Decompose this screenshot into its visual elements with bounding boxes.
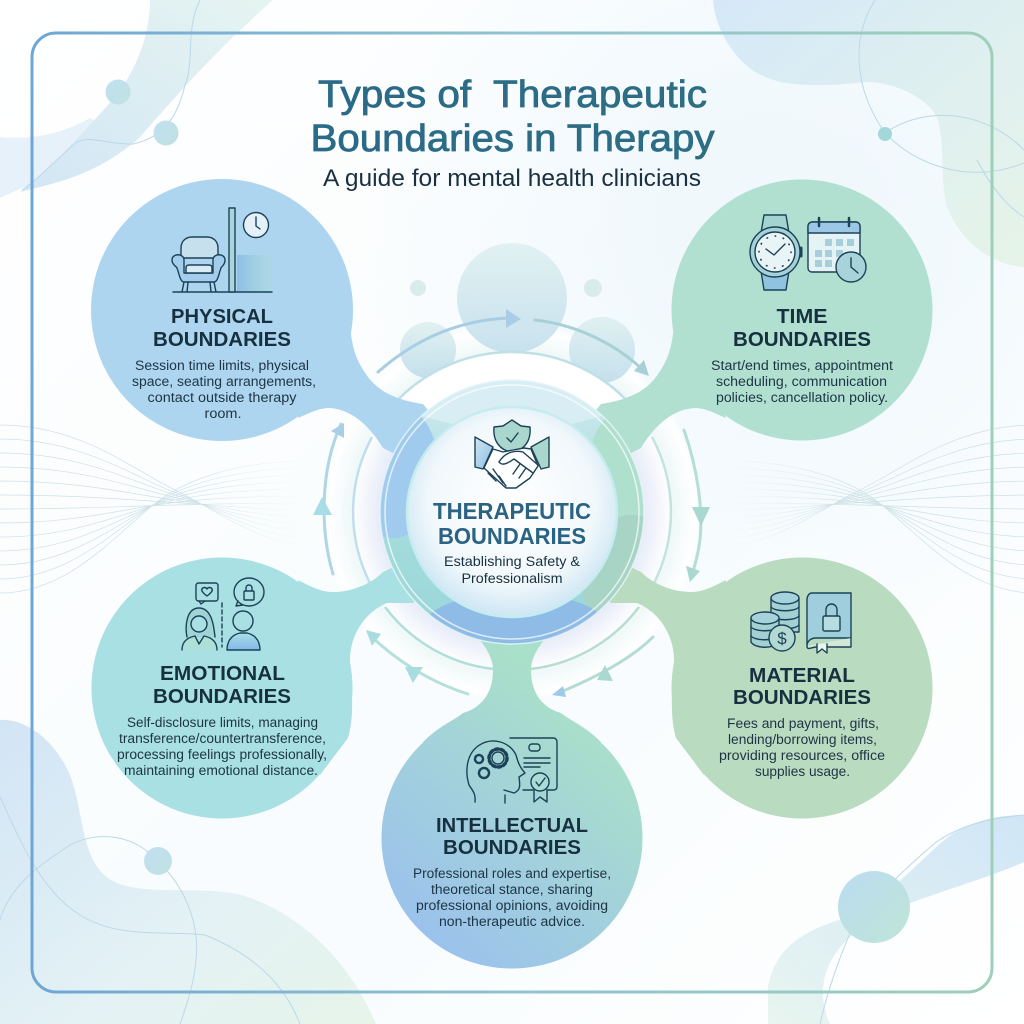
hub disc: BOUNDARIES [438, 523, 586, 549]
hub text: Establishing Safety & [444, 553, 581, 569]
wave pattern right [725, 425, 1024, 593]
panel: intellectual boundaries [382, 708, 642, 968]
heading: EMOTIONAL [160, 663, 285, 685]
description: Self-disclosure limits, managing [127, 715, 318, 730]
description: space, seating arrangements, [132, 374, 316, 389]
icon: shield and handshake [475, 420, 549, 488]
description: professional opinions, avoiding [416, 898, 608, 913]
icon: watch, calendar and clock [750, 215, 866, 290]
heading: INTELLECTUAL [436, 815, 588, 837]
panel: time boundaries [672, 180, 932, 440]
icon: coins and locked book [751, 592, 851, 653]
wave pattern left [0, 425, 310, 593]
heading: TIME [776, 306, 828, 328]
hub halo [322, 322, 702, 702]
icon: coins and locked book: $ [777, 629, 787, 648]
description: transference/countertransference, [119, 731, 326, 746]
description: Professional roles and expertise, [413, 866, 611, 881]
description: theoretical stance, sharing [431, 882, 593, 897]
panel: emotional boundaries: BOUNDARIES [153, 686, 291, 708]
description: providing resources, office [719, 748, 885, 763]
description: room. [204, 406, 242, 421]
description: maintaining emotional distance. [124, 763, 318, 778]
hub heading: THERAPEUTIC [433, 498, 591, 524]
title [310, 74, 714, 160]
description [719, 716, 885, 779]
panel: physical boundaries [91, 179, 353, 441]
panel: time boundaries: BOUNDARIES [733, 329, 871, 351]
decorative circles above hub [400, 243, 635, 383]
panel: intellectual boundaries: BOUNDARIES [443, 837, 581, 859]
connectors to hub [298, 290, 726, 790]
white band and thin arcs around hub [353, 352, 671, 669]
panel: emotional boundaries [92, 558, 352, 818]
description [117, 715, 327, 778]
description [413, 866, 611, 929]
panel: material boundaries [672, 558, 932, 818]
description: Fees and payment, gifts, [727, 716, 879, 731]
description: contact outside therapy [148, 390, 297, 405]
icon: head with gears and certificate [467, 738, 557, 803]
description: policies, cancellation policy. [716, 390, 888, 405]
heading: MATERIAL [749, 665, 855, 687]
description [711, 358, 893, 405]
description [132, 358, 316, 421]
cycle arrows [313, 309, 710, 697]
title: Types of Therapeutic [318, 74, 707, 116]
description: lending/borrowing items, [728, 732, 877, 747]
hub disc: Professionalism [462, 570, 562, 586]
panel: physical boundaries: BOUNDARIES [153, 329, 291, 351]
description: Start/end times, appointment [711, 358, 893, 373]
heading: PHYSICAL [171, 306, 273, 328]
description: supplies usage. [755, 764, 850, 779]
panel: material boundaries: BOUNDARIES [733, 687, 871, 709]
icon: two people with speech bubbles [182, 578, 264, 650]
hub ring [380, 379, 644, 645]
hub disc [407, 407, 617, 617]
description: processing feelings professionally, [117, 747, 327, 762]
description: Session time limits, physical [135, 358, 309, 373]
icon: armchair, wall and clock [172, 208, 272, 292]
description: non-therapeutic advice. [439, 914, 585, 929]
description: scheduling, communication [716, 374, 887, 389]
title: Boundaries in Therapy [310, 118, 714, 160]
subtitle: A guide for mental health clinicians [323, 165, 701, 192]
